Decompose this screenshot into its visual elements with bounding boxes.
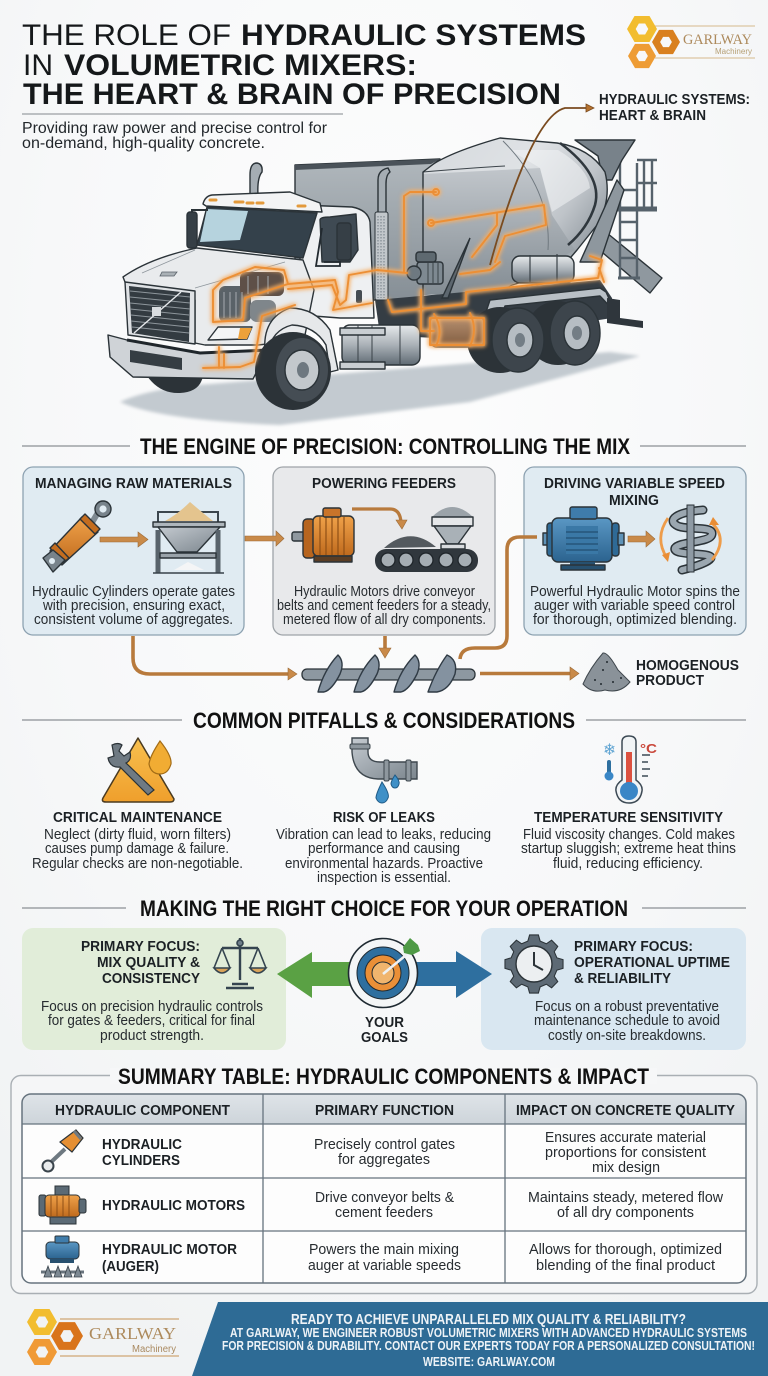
bumper — [108, 335, 268, 379]
label: homogenous product: PRODUCT — [636, 673, 704, 689]
left mirror — [187, 210, 208, 248]
engine — [219, 272, 284, 322]
panel: managing raw materials: with precision, ensuring exact, — [42, 598, 225, 614]
glowing hydraulic lines — [203, 189, 604, 368]
panel: mix quality focus: PRIMARY FOCUS: — [81, 939, 200, 955]
rear wheels — [467, 301, 600, 373]
panel: driving variable speed mixing: auger with variable speed control — [534, 598, 735, 614]
table row: hydraulic motor auger: Powers the main mixing — [309, 1242, 459, 1258]
icon: piston — [42, 1130, 83, 1172]
table row: hydraulic cylinders: for aggregates — [338, 1152, 430, 1168]
panel: driving variable speed mixing — [524, 467, 746, 635]
icon: spinning auger — [661, 505, 720, 572]
icon: blue motor with auger — [41, 1236, 84, 1277]
arrow: auger to product — [480, 667, 579, 680]
footer logo: Garlway — [27, 1309, 179, 1365]
panel: driving variable speed mixing: MIXING — [609, 493, 659, 509]
pitfall: temperature sensitivity — [521, 736, 736, 872]
aggregate box — [295, 159, 440, 300]
title: HYDRAULIC SYSTEMS — [241, 19, 586, 52]
footer call to action banner: READY TO ACHIEVE UNPARALLELED MIX QUALITY & RELIABILITY? — [291, 1312, 686, 1328]
hood — [123, 248, 314, 345]
table row: hydraulic motors — [39, 1186, 724, 1224]
icon: leaking pipe — [350, 738, 417, 803]
icon: goal target — [348, 938, 420, 1008]
rear step — [607, 298, 643, 328]
lower tyre — [147, 376, 203, 393]
pitfall: critical maintenance: causes pump damage & failure. — [45, 841, 229, 857]
table row: hydraulic motors: of all dry components — [557, 1205, 694, 1221]
table row: hydraulic motor auger: HYDRAULIC MOTOR — [102, 1242, 237, 1258]
ladder — [607, 160, 657, 278]
table row: hydraulic cylinders: Ensures accurate material — [545, 1130, 706, 1146]
table header row: IMPACT ON CONCRETE QUALITY — [516, 1103, 735, 1119]
icon: conveyor and feeder — [375, 507, 478, 572]
table row: hydraulic cylinders: Precisely control gates — [314, 1137, 455, 1153]
support fin — [442, 238, 470, 298]
grille — [125, 282, 195, 344]
panel: operational uptime focus: maintenance schedule to avoid — [534, 1013, 720, 1029]
auger — [302, 655, 475, 692]
table row: hydraulic cylinders: HYDRAULIC — [102, 1137, 182, 1153]
icon: aggregate hopper — [153, 502, 225, 573]
discharge chute — [603, 233, 662, 293]
table row: hydraulic motor auger: Allows for thorough, optimized — [529, 1242, 722, 1258]
table row: hydraulic motor auger: blending of the final product — [536, 1258, 715, 1274]
panel: operational uptime focus: & RELIABILITY — [574, 971, 671, 987]
icon: gear with clock — [505, 935, 563, 993]
feed hopper — [575, 140, 635, 180]
panel: managing raw materials: MANAGING RAW MATERIALS — [35, 476, 232, 492]
title: IN — [23, 49, 53, 82]
heading: summary table: SUMMARY TABLE: HYDRAULIC COMPONENTS & IMPACT — [118, 1064, 649, 1089]
footer call to action banner: WEBSITE: GARLWAY.COM — [423, 1354, 555, 1369]
footer call to action banner — [192, 1302, 768, 1376]
heading: making the right choice: MAKING THE RIGHT CHOICE FOR YOUR OPERATION — [140, 896, 628, 921]
table header row: PRIMARY FUNCTION — [315, 1103, 454, 1119]
panel: operational uptime focus: Focus on a robust preventative — [535, 999, 719, 1015]
pitfall: critical maintenance: CRITICAL MAINTENANCE — [53, 810, 222, 826]
air tank — [512, 254, 574, 283]
label: your goals — [361, 1015, 408, 1046]
panel: powering feeders: belts and cement feeders for a steady, — [277, 598, 491, 614]
side mirror — [337, 223, 351, 260]
arrow: raw materials to feeders — [245, 531, 284, 546]
pitfall: critical maintenance: Neglect (dirty fluid, worn filters) — [44, 827, 231, 843]
arrow: cylinder to hopper — [100, 532, 148, 547]
table row: hydraulic motors: HYDRAULIC MOTORS — [102, 1198, 245, 1214]
logo: Garlway top right: Machinery — [715, 47, 752, 56]
icon: orange hydraulic motor — [292, 508, 354, 562]
callout: hydraulic systems label — [599, 92, 750, 124]
panel: driving variable speed mixing: Powerful Hydraulic Motor spins the — [530, 584, 740, 600]
icon: balance scales — [214, 938, 266, 988]
subtitle: on-demand, high-quality concrete. — [22, 135, 265, 152]
headlight — [208, 327, 252, 340]
icon: thermometer: ❄ — [603, 742, 616, 759]
pitfall: risk of leaks: Vibration can lead to leaks, reducing — [276, 827, 491, 843]
table row: hydraulic motors: Maintains steady, metered flow — [528, 1190, 724, 1206]
arrow: auger up to variable speed panel — [460, 537, 537, 659]
label: your goals: GOALS — [361, 1030, 408, 1046]
table frame — [22, 1094, 746, 1283]
cab visor — [203, 192, 322, 212]
title — [22, 19, 586, 111]
panel: operational uptime focus: OPERATIONAL UPTIME — [574, 955, 730, 971]
subtitle: Providing raw power and precise control for — [22, 120, 328, 137]
callout: hydraulic systems label: HEART & BRAIN — [599, 108, 706, 124]
panel: operational uptime focus — [481, 928, 746, 1050]
panel: mix quality focus: for gates & feeders, critical for final — [48, 1013, 255, 1029]
truck illustration — [108, 138, 662, 425]
pitfall: critical maintenance — [32, 738, 243, 872]
pitfall: critical maintenance: Regular checks are non-negotiable. — [32, 856, 243, 872]
exhaust stack left — [250, 163, 262, 195]
arrow: motor to auger — [628, 531, 655, 547]
chassis frame — [375, 280, 612, 340]
cab body — [300, 205, 374, 318]
label: homogenous product — [636, 658, 739, 689]
table header row: HYDRAULIC COMPONENT — [55, 1103, 230, 1119]
logo: Garlway top right — [627, 16, 755, 68]
table row: hydraulic motors: cement feeders — [335, 1205, 433, 1221]
icon: concrete pile — [583, 653, 630, 691]
callout: hydraulic systems leader arrow — [490, 104, 594, 265]
icon: thermometer: °C — [640, 741, 658, 756]
panel: managing raw materials: Hydraulic Cylinders operate gates — [32, 584, 235, 600]
panel: powering feeders — [273, 467, 495, 635]
title: THE HEART & BRAIN OF PRECISION — [23, 78, 561, 111]
pitfall: temperature sensitivity: TEMPERATURE SENSITIVITY — [534, 810, 723, 826]
table row: hydraulic cylinders: CYLINDERS — [102, 1153, 180, 1169]
icon: hydraulic cylinder — [43, 501, 111, 572]
fender and wheel arch — [265, 308, 338, 372]
panel: driving variable speed mixing: for thorough, optimized blending. — [533, 612, 737, 628]
icon: warning triangle with wrench and drop — [102, 738, 174, 802]
pitfall: risk of leaks: performance and causing — [308, 841, 460, 857]
icon: orange motor — [39, 1186, 86, 1224]
callout: hydraulic systems label: HYDRAULIC SYSTEMS: — [599, 92, 750, 108]
front wheel — [255, 332, 331, 410]
table row: hydraulic motor auger — [41, 1236, 722, 1277]
panel: summary table — [11, 1064, 757, 1294]
hydraulic pump — [407, 252, 443, 284]
table row: hydraulic cylinders: mix design — [592, 1160, 660, 1176]
table row: hydraulic cylinders — [42, 1130, 706, 1176]
table row: hydraulic motors: Drive conveyor belts & — [315, 1190, 454, 1206]
panel: mix quality focus: Focus on precision hydraulic controls — [41, 999, 263, 1015]
panel: mix quality focus — [22, 928, 286, 1050]
table row: hydraulic cylinders: proportions for consistent — [545, 1145, 706, 1161]
reservoir tank — [430, 316, 484, 347]
logo: Garlway top right: GARLWAY — [683, 32, 752, 48]
pitfall: temperature sensitivity: startup sluggish; extreme heat thins — [521, 841, 736, 857]
exhaust stack right — [375, 168, 390, 300]
table row: hydraulic motor auger: (AUGER) — [102, 1259, 159, 1275]
heading: engine of precision: THE ENGINE OF PRECISION: CONTROLLING THE MIX — [140, 434, 630, 459]
title: THE ROLE OF — [22, 19, 231, 52]
arrow: feeders down to auger — [379, 636, 391, 658]
table row: hydraulic motor auger: auger at variable speeds — [308, 1258, 461, 1274]
pitfall: temperature sensitivity: Fluid viscosity changes. Cold makes — [523, 827, 735, 843]
pitfall: risk of leaks — [276, 738, 491, 886]
panel: powering feeders: metered flow of all dry components. — [283, 612, 486, 628]
mixer drum — [418, 138, 607, 292]
pitfall: risk of leaks: inspection is essential. — [317, 870, 451, 886]
panel: managing raw materials — [23, 467, 244, 635]
arrow: toward mix quality — [277, 952, 354, 998]
pitfall: risk of leaks: environmental hazards. Proactive — [285, 856, 483, 872]
panel: mix quality focus: MIX QUALITY & — [97, 955, 200, 971]
footer logo: Garlway: Machinery — [132, 1344, 176, 1355]
arrow: raw materials down to auger — [133, 636, 297, 680]
side window — [320, 214, 358, 262]
icon: thermometer — [603, 736, 658, 803]
icon: blue hydraulic motor — [543, 507, 624, 570]
title: VOLUMETRIC MIXERS: — [64, 49, 417, 82]
fuel tank and steps — [340, 325, 420, 369]
pitfall: risk of leaks: RISK OF LEAKS — [333, 810, 435, 826]
panel: managing raw materials: consistent volume of aggregates. — [34, 612, 233, 628]
subtitle — [22, 120, 328, 152]
arrow: motor to conveyor — [352, 509, 407, 529]
label: homogenous product: HOMOGENOUS — [636, 658, 739, 674]
panel: powering feeders: POWERING FEEDERS — [312, 476, 456, 492]
pitfall: temperature sensitivity: fluid, reducing efficiency. — [553, 856, 703, 872]
table header row — [55, 1103, 735, 1119]
panel: powering feeders: Hydraulic Motors drive conveyor — [294, 584, 475, 600]
panel: operational uptime focus: costly on-site breakdowns. — [548, 1028, 706, 1044]
panel: mix quality focus: CONSISTENCY — [102, 971, 200, 987]
panel: driving variable speed mixing: DRIVING VARIABLE SPEED — [544, 476, 725, 492]
panel: mix quality focus: product strength. — [100, 1028, 204, 1044]
label: your goals: YOUR — [365, 1015, 404, 1031]
panel: operational uptime focus: PRIMARY FOCUS: — [574, 939, 693, 955]
door handle — [356, 290, 362, 303]
arrow: toward uptime — [414, 951, 492, 998]
footer logo: Garlway: GARLWAY — [89, 1324, 176, 1343]
heading: common pitfalls: COMMON PITFALLS & CONSIDERATIONS — [193, 708, 575, 733]
windshield — [197, 207, 317, 258]
ground shadow — [120, 352, 640, 425]
